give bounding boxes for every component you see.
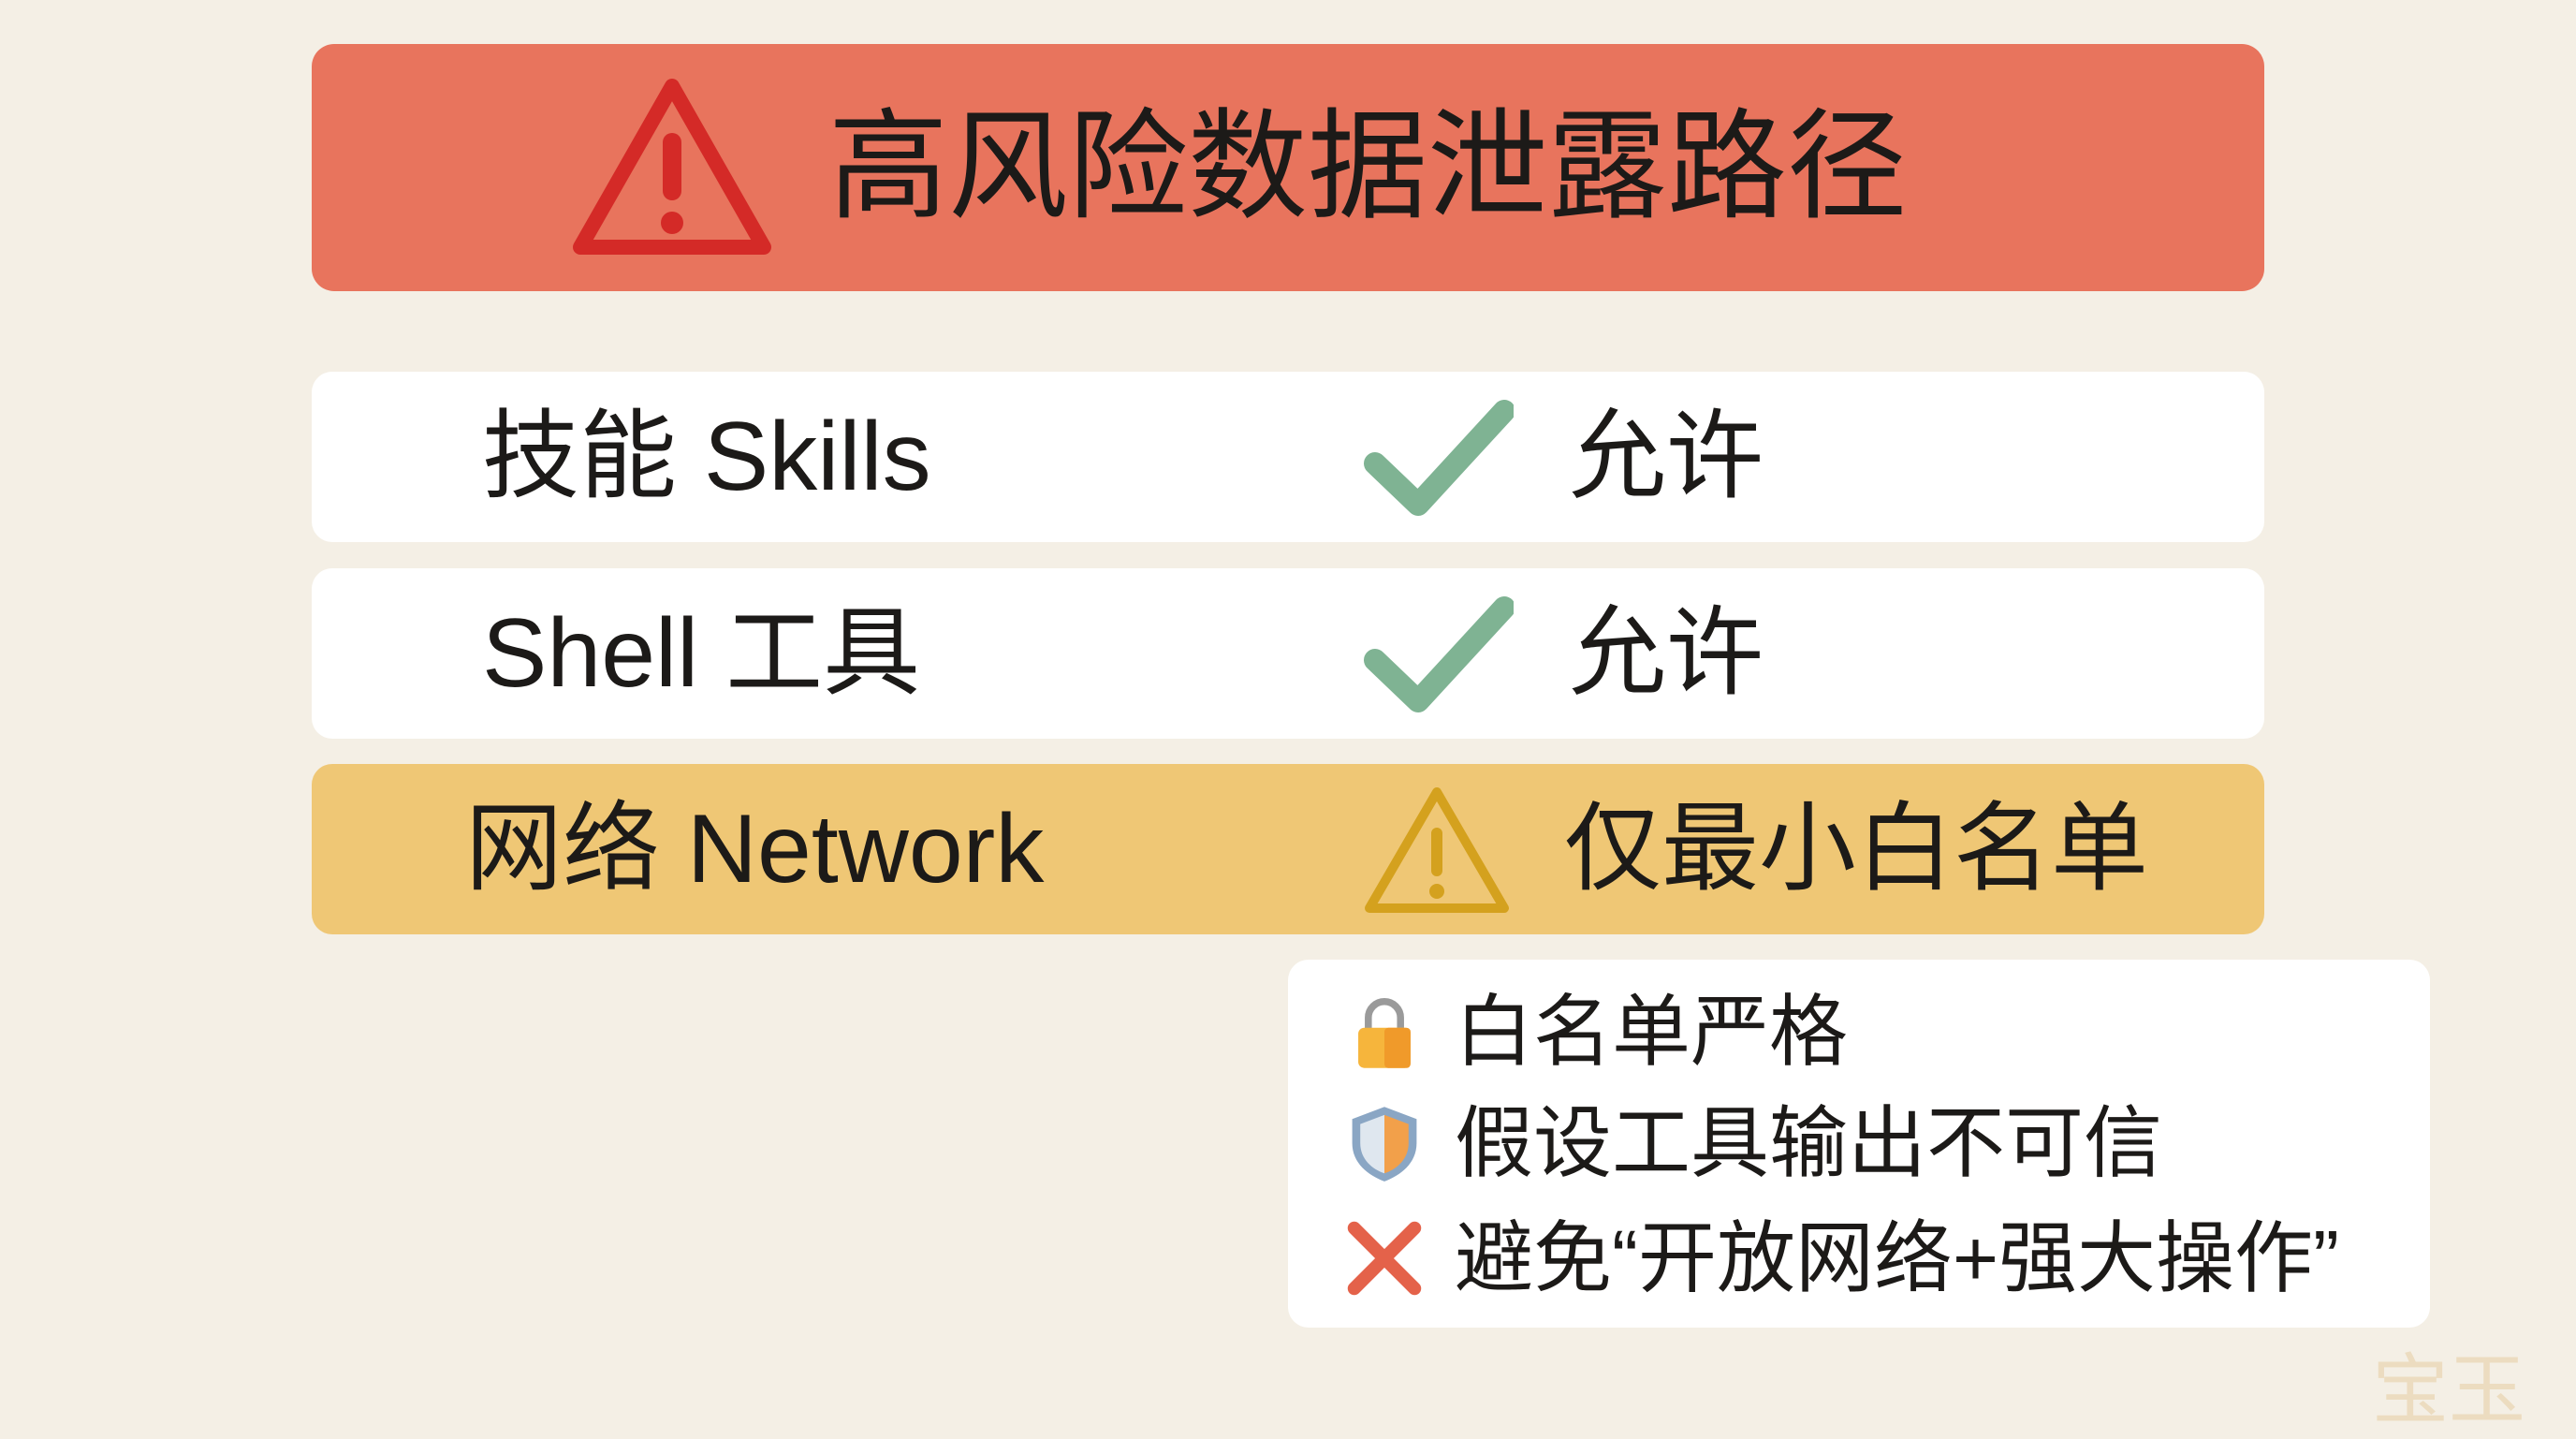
item: avoid — [1348, 1214, 2339, 1302]
title: 高风险数据泄露路径 — [828, 100, 1907, 234]
row: shell — [312, 568, 2264, 739]
label: 网络 Network — [465, 795, 1044, 903]
callout: rules: 白名单严格 — [1455, 988, 1848, 1076]
icon: check — [1364, 596, 1514, 712]
status: 允许 — [1569, 599, 1764, 708]
row: network — [312, 764, 2264, 934]
label: Shell 工具 — [482, 599, 920, 708]
header banner — [312, 44, 2264, 291]
watermark: 宝玉 — [2372, 1348, 2525, 1433]
icon: warning — [1365, 787, 1509, 913]
icon: check — [1364, 400, 1514, 516]
status: 允许 — [1569, 403, 1764, 511]
item: untrusted — [1352, 1099, 2162, 1187]
row: skills — [312, 372, 2264, 542]
status: 仅最小白名单 — [1564, 795, 2148, 903]
callout: rules — [1288, 960, 2430, 1328]
icon: warning triangle — [573, 79, 771, 255]
label: 技能 Skills — [482, 403, 931, 511]
item: whitelist — [1358, 988, 1848, 1076]
callout: rules: 避免“开放网络+强大操作” — [1455, 1214, 2339, 1302]
callout: rules: 假设工具输出不可信 — [1455, 1099, 2162, 1187]
